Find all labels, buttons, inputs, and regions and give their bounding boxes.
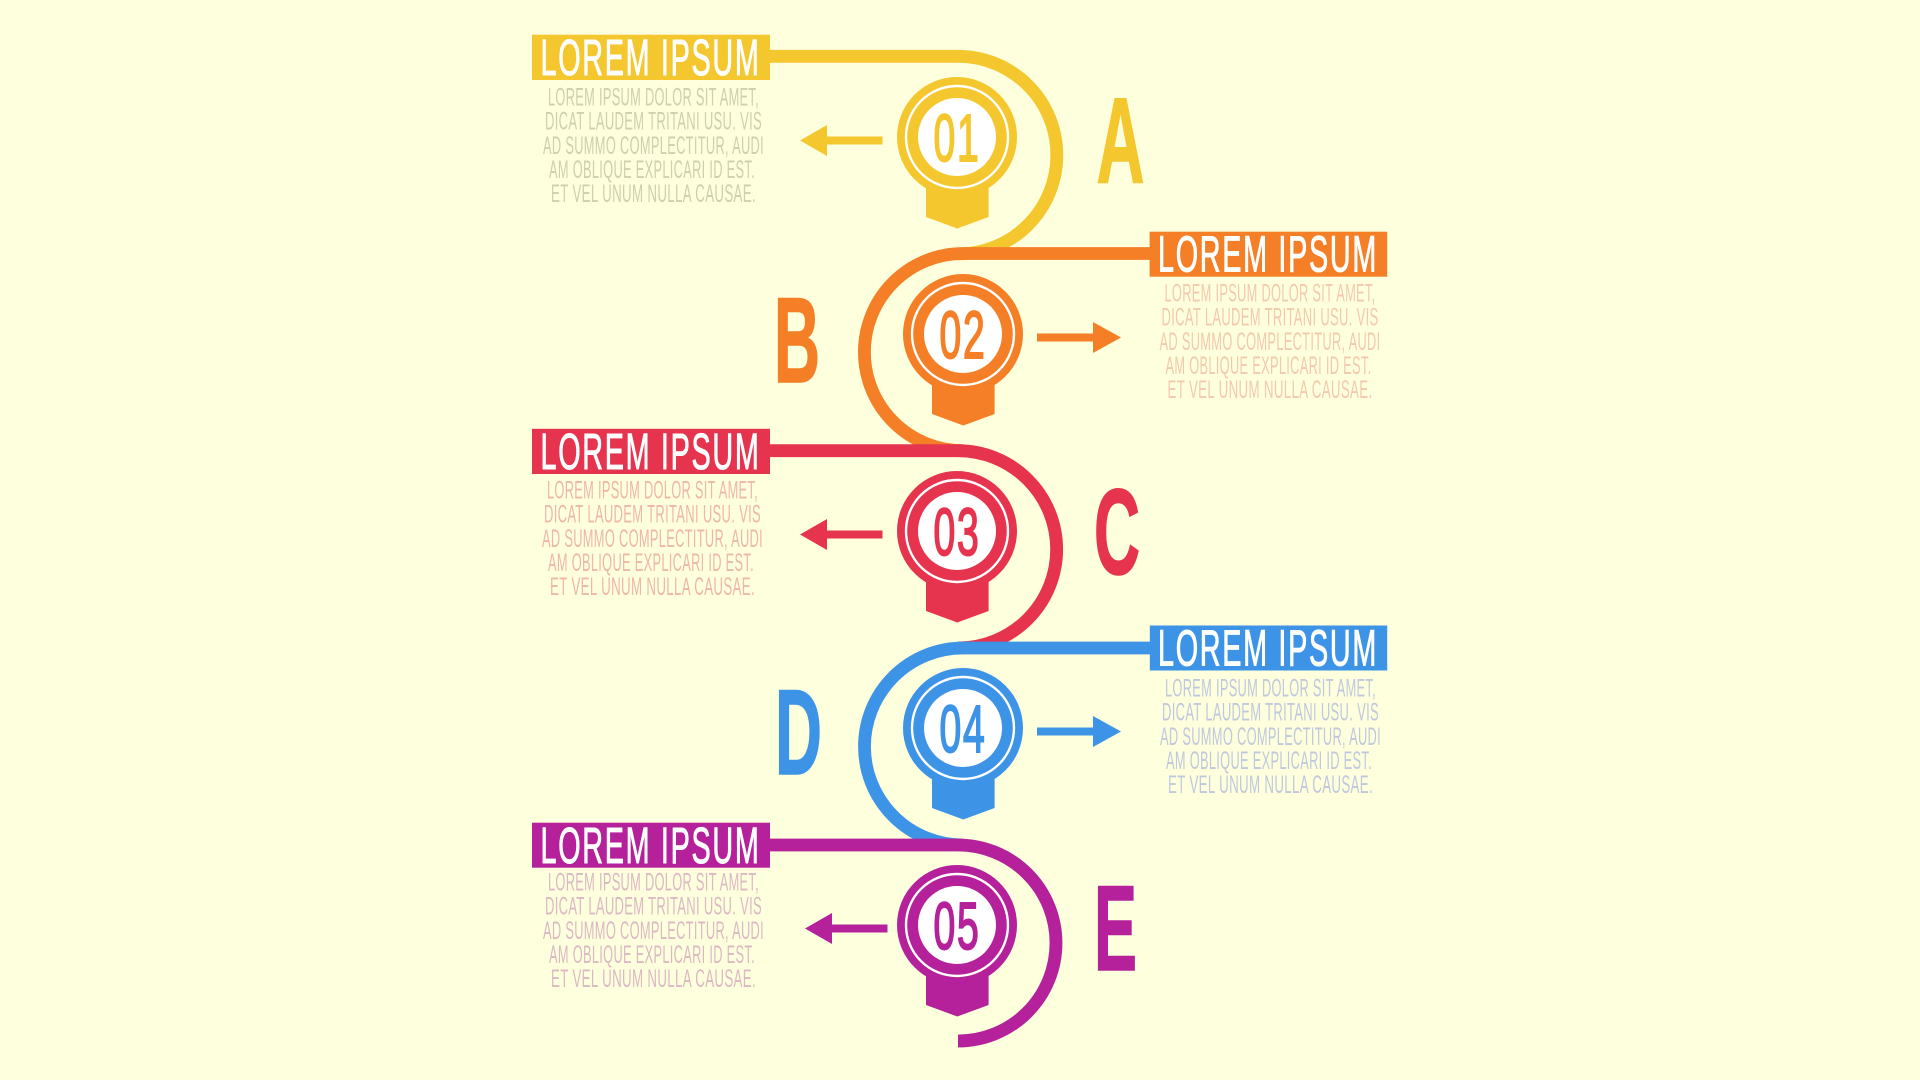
text block B: AM OBLIQUE EXPLICARI ID EST.: [1166, 352, 1372, 380]
text block E: [543, 868, 764, 993]
text block D: LOREM IPSUM DOLOR SIT AMET,: [1165, 674, 1376, 702]
badge 04: 04: [940, 692, 986, 767]
step D: blue: [775, 620, 1387, 845]
arrow C: [800, 519, 882, 550]
arrow D: [1037, 716, 1121, 747]
step E: purple: [532, 817, 1137, 1041]
letter C: C: [1094, 464, 1140, 600]
arrow E: [805, 913, 888, 944]
text block C: LOREM IPSUM DOLOR SIT AMET,: [547, 476, 758, 504]
text block E: LOREM IPSUM DOLOR SIT AMET,: [548, 868, 759, 896]
text block D: ET VEL UNUM NULLA CAUSAE.: [1168, 771, 1373, 799]
connector path A: [770, 56, 1057, 254]
text block E: ET VEL UNUM NULLA CAUSAE.: [551, 965, 756, 993]
badge 02: 02: [940, 298, 986, 373]
arrow A: [800, 125, 882, 156]
text block B: LOREM IPSUM DOLOR SIT AMET,: [1164, 280, 1376, 308]
text block B: ET VEL UNUM NULLA CAUSAE.: [1168, 376, 1372, 404]
connector path D: [864, 648, 1150, 845]
badge 01: 01: [934, 101, 980, 176]
text block D: DICAT LAUDEM TRITANI USU. VIS: [1162, 699, 1379, 727]
heading E: [532, 817, 770, 874]
text block A: [543, 84, 764, 208]
heading A: LOREM IPSUM: [540, 29, 760, 86]
text block C: AM OBLIQUE EXPLICARI ID EST.: [548, 549, 754, 577]
text block D: AD SUMMO COMPLECTITUR, AUDI: [1160, 723, 1381, 751]
letter B: B: [774, 272, 820, 408]
text block A: ET VEL UNUM NULLA CAUSAE.: [551, 180, 756, 208]
text block B: [1160, 280, 1380, 404]
text block E: AM OBLIQUE EXPLICARI ID EST.: [549, 941, 755, 969]
text block B: AD SUMMO COMPLECTITUR, AUDI: [1160, 328, 1380, 356]
badge 05: 05: [934, 889, 980, 964]
step C: red: [532, 423, 1140, 648]
heading A: [532, 29, 770, 86]
badge 03: [897, 471, 1017, 622]
badge 04: [903, 668, 1023, 820]
connector path C: [770, 451, 1057, 648]
text block A: LOREM IPSUM DOLOR SIT AMET,: [548, 84, 759, 112]
letter E: E: [1094, 860, 1137, 996]
heading E: LOREM IPSUM: [540, 817, 760, 874]
heading B: LOREM IPSUM: [1158, 226, 1378, 282]
text block C: [542, 476, 763, 601]
text block A: AM OBLIQUE EXPLICARI ID EST.: [549, 156, 755, 184]
text block C: AD SUMMO COMPLECTITUR, AUDI: [542, 525, 763, 553]
badge 03: 03: [934, 495, 980, 570]
heading B: [1150, 226, 1387, 282]
connector path B: [864, 254, 1150, 451]
text block C: ET VEL UNUM NULLA CAUSAE.: [550, 573, 755, 601]
text block B: DICAT LAUDEM TRITANI USU. VIS: [1162, 304, 1378, 332]
step A: yellow: [532, 29, 1144, 254]
text block E: DICAT LAUDEM TRITANI USU. VIS: [545, 893, 762, 921]
heading D: [1150, 620, 1387, 676]
badge 02: [903, 274, 1023, 426]
text block C: DICAT LAUDEM TRITANI USU. VIS: [544, 501, 761, 529]
arrow B: [1037, 322, 1121, 353]
badge 01: [897, 77, 1017, 228]
step B: orange: [774, 226, 1387, 451]
text block D: [1160, 674, 1381, 799]
heading C: LOREM IPSUM: [540, 423, 760, 480]
badge 05: [897, 865, 1017, 1016]
heading C: [532, 423, 770, 480]
text block A: DICAT LAUDEM TRITANI USU. VIS: [545, 108, 762, 136]
text block A: AD SUMMO COMPLECTITUR, AUDI: [543, 132, 764, 160]
text block D: AM OBLIQUE EXPLICARI ID EST.: [1166, 747, 1372, 775]
connector path E: [770, 845, 1056, 1041]
letter D: D: [775, 664, 822, 800]
text block E: AD SUMMO COMPLECTITUR, AUDI: [543, 917, 764, 945]
heading D: LOREM IPSUM: [1158, 620, 1378, 676]
letter A: A: [1096, 73, 1144, 209]
